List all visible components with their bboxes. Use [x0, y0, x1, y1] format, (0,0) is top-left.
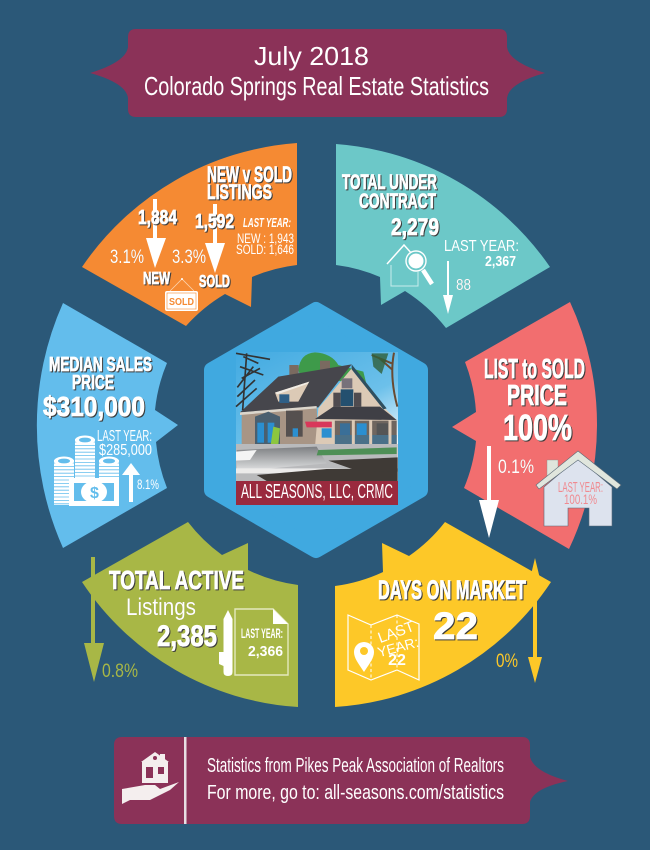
heading: median sales price: MEDIAN SALES: [49, 353, 152, 376]
panel: total under contract: [336, 144, 550, 328]
illustration: house logo: [236, 352, 398, 505]
arrow: under contract down: [443, 261, 453, 314]
footer text: [207, 755, 504, 804]
icon: document with last year figure: 2,366: [248, 643, 283, 660]
last year figures: [236, 216, 294, 257]
percent: days on market change: 0%: [496, 651, 518, 672]
icon: house with last year figure: LAST YEAR:: [558, 479, 603, 496]
value: days on market: 22: [433, 606, 478, 648]
percent: list to sold change: 0.1%: [498, 457, 534, 478]
panel: new v sold listings: [82, 143, 297, 326]
percent: active change: 0.8%: [102, 661, 138, 682]
icon: document with last year figure: LAST YEAR:: [241, 625, 283, 641]
icon: map with last year figure: [348, 615, 420, 680]
panel: list to sold price: [452, 302, 621, 549]
icon: document with last year figure: [235, 609, 288, 675]
heading: total under contract: CONTRACT: [359, 190, 436, 213]
last year figure: LAST YEAR:: [444, 238, 519, 255]
percent: sold change: 3.3%: [172, 247, 206, 268]
icon: coins and banknote: [54, 436, 119, 506]
arrow: days on market up and down: [528, 558, 542, 683]
last year figure: $285,000: [99, 442, 152, 459]
heading: total under contract: [342, 171, 437, 213]
icon: house with last year figure: [536, 451, 621, 526]
panel: days on market: [335, 522, 551, 707]
icon: coins and banknote: $: [90, 485, 99, 502]
label: sold: SOLD: [199, 271, 230, 291]
subheading: listings: Listings: [126, 594, 196, 621]
arrow: list to sold down: [479, 446, 499, 538]
logo banner: ALL SEASONS, LLC, CRMC: [241, 481, 393, 503]
icon: map with last year figure: YEAR:: [376, 634, 420, 660]
heading: total under contract: TOTAL UNDER: [342, 171, 437, 194]
heading: new v sold listings: LISTINGS: [207, 181, 272, 204]
last year figure: [444, 238, 519, 270]
footer banner: [114, 737, 568, 824]
percent: new change: 3.1%: [110, 247, 144, 268]
last year figure: 2,367: [485, 253, 516, 270]
panel: median sales price: [37, 303, 178, 548]
icon: hand holding house: [122, 752, 179, 804]
logo banner: [236, 481, 398, 505]
heading: list to sold price: [484, 353, 585, 412]
icon: house with last year figure: 100.1%: [564, 491, 597, 507]
arrow: new listings down: [146, 199, 166, 268]
icon: house with magnifier: [387, 245, 432, 286]
value: under contract: 2,279: [391, 214, 439, 241]
last year figures: SOLD: 1,646: [236, 242, 294, 257]
value: median price: $310,000: [43, 391, 145, 422]
title banner: Colorado Springs Real Estate Statistics: [144, 71, 489, 101]
heading: median sales price: PRICE: [72, 371, 114, 394]
heading: total active: TOTAL ACTIVE: [109, 565, 244, 595]
last year figure: LAST YEAR:: [97, 428, 152, 445]
icon: map with last year figure: 22: [388, 652, 406, 669]
panel: centre hexagon: [212, 310, 420, 550]
last year figures: NEW : 1,943: [237, 231, 294, 246]
icon: map with last year figure: LAST: [376, 618, 417, 647]
panel: total active listings: [82, 522, 298, 707]
arrow: price up: [122, 463, 140, 502]
percent: price change: 8.1%: [137, 476, 159, 492]
last year figures: LAST YEAR:: [243, 216, 291, 230]
label: new: NEW: [143, 268, 170, 288]
icon: pen: [219, 610, 232, 676]
title banner: July 2018: [254, 41, 369, 71]
heading: median sales price: [49, 353, 152, 394]
heading: new v sold listings: [207, 162, 292, 204]
value: sold listings: 1,592: [195, 210, 234, 233]
icon: sold sign: [165, 278, 198, 311]
heading: new v sold listings: NEW v SOLD: [207, 162, 292, 187]
heading: list to sold price: PRICE: [507, 380, 567, 412]
arrow: sold listings down: [205, 204, 225, 273]
value: active listings: 2,385: [157, 620, 217, 653]
last year figure: [97, 428, 152, 459]
value: new listings: 1,884: [138, 206, 177, 229]
divider bar: [184, 737, 186, 824]
heading: days on market: DAYS ON MARKET: [378, 575, 526, 605]
icon: sold sign: SOLD: [169, 296, 194, 308]
footer text: Statistics from Pikes Peak Association of Realtors: [207, 755, 504, 777]
arrow: active listings down: [84, 557, 104, 682]
footer text: For more, go to: all-seasons.com/statistics: [207, 781, 504, 804]
change: under contract: 88: [456, 277, 471, 294]
title banner: [90, 29, 545, 117]
value: list to sold: 100%: [503, 407, 572, 448]
